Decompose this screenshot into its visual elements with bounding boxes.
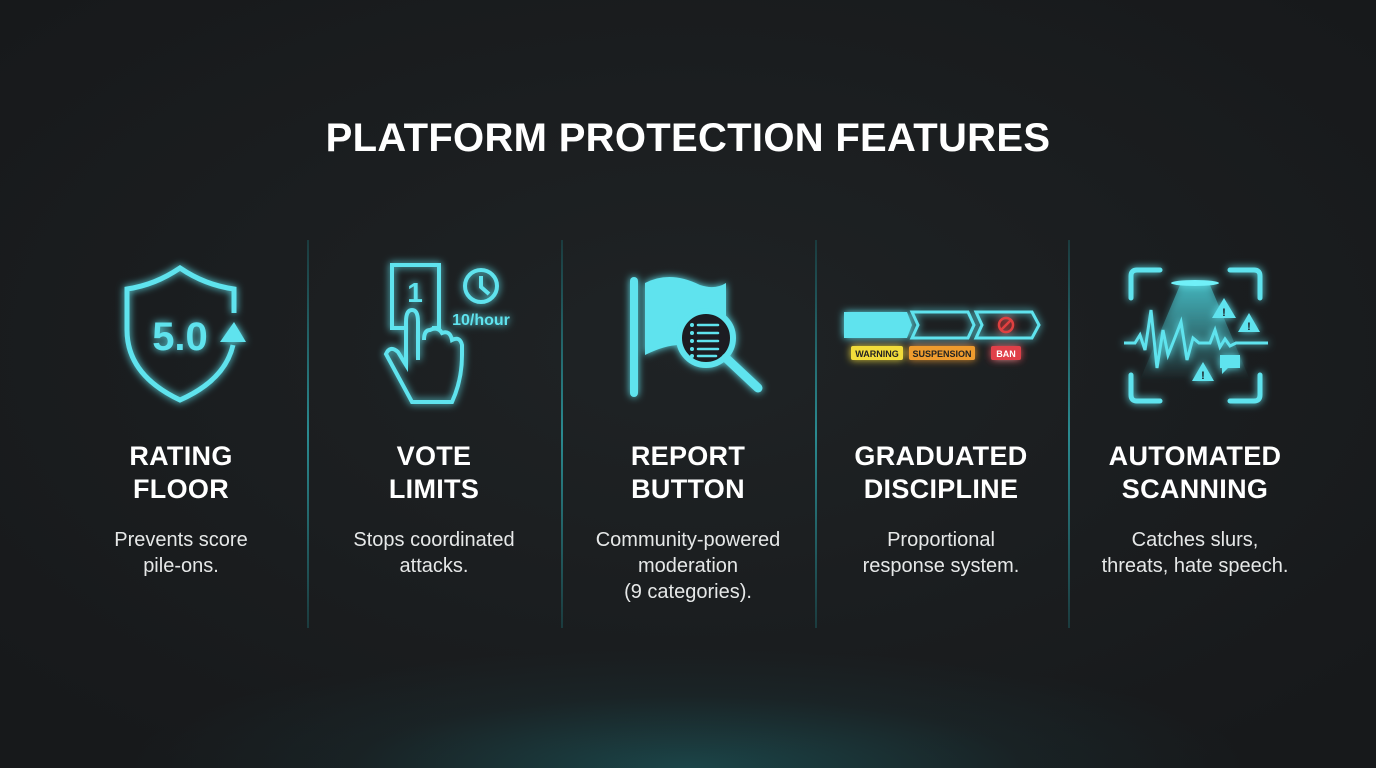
icon: vote hand with clock	[386, 265, 510, 402]
icon: graduated discipline bar: SUSPENSION	[912, 349, 972, 359]
panel: report button: REPORT	[631, 441, 745, 471]
icon: scanning frame: !	[1222, 307, 1226, 319]
panel: vote limits	[353, 441, 515, 577]
panel: graduated discipline: GRADUATED	[854, 441, 1028, 471]
title: PLATFORM PROTECTION FEATURES	[326, 116, 1050, 160]
icon: graduated discipline bar: BAN	[996, 349, 1016, 359]
panel: rating floor: RATING	[129, 441, 233, 471]
panel: rating floor	[114, 441, 248, 577]
panel: rating floor: Prevents score	[114, 529, 248, 551]
panel: rating floor: pile-ons.	[143, 555, 219, 577]
panel: graduated discipline: Proportional	[887, 529, 995, 551]
icon: shield 5.0: 5.0	[152, 315, 208, 359]
icon: scanning frame: !	[1201, 370, 1205, 382]
panel: report button: BUTTON	[631, 474, 745, 504]
panel: rating floor: FLOOR	[133, 474, 229, 504]
icon: graduated discipline bar: WARNING	[855, 349, 899, 359]
icon: vote hand with clock: 10/hour	[452, 312, 510, 329]
panel: report button	[596, 441, 780, 603]
icon: flag with magnifier	[630, 277, 758, 397]
panel: automated scanning: AUTOMATED	[1109, 441, 1281, 471]
panel: vote limits: attacks.	[400, 555, 468, 577]
icon: graduated discipline bar	[844, 312, 1039, 360]
panel: automated scanning	[1102, 441, 1288, 577]
panel: vote limits: LIMITS	[389, 474, 479, 504]
panel: automated scanning: threats, hate speech.	[1102, 555, 1288, 577]
icon: shield 5.0	[127, 268, 246, 400]
icon: vote hand with clock: 1	[407, 277, 423, 308]
icon: scanning frame: !	[1247, 321, 1251, 333]
panel: graduated discipline: response system.	[863, 555, 1019, 577]
panel: vote limits: VOTE	[397, 441, 471, 471]
panel: report button: Community-powered	[596, 529, 780, 551]
panel: automated scanning: SCANNING	[1122, 474, 1268, 504]
panel: automated scanning: Catches slurs,	[1132, 529, 1258, 551]
panel: report button: moderation	[638, 555, 738, 577]
panel: report button: (9 categories).	[624, 581, 752, 603]
panel: graduated discipline: DISCIPLINE	[864, 474, 1018, 504]
panel: graduated discipline	[854, 441, 1028, 577]
panel: vote limits: Stops coordinated	[353, 529, 515, 551]
icon: scanning frame	[1124, 270, 1268, 401]
